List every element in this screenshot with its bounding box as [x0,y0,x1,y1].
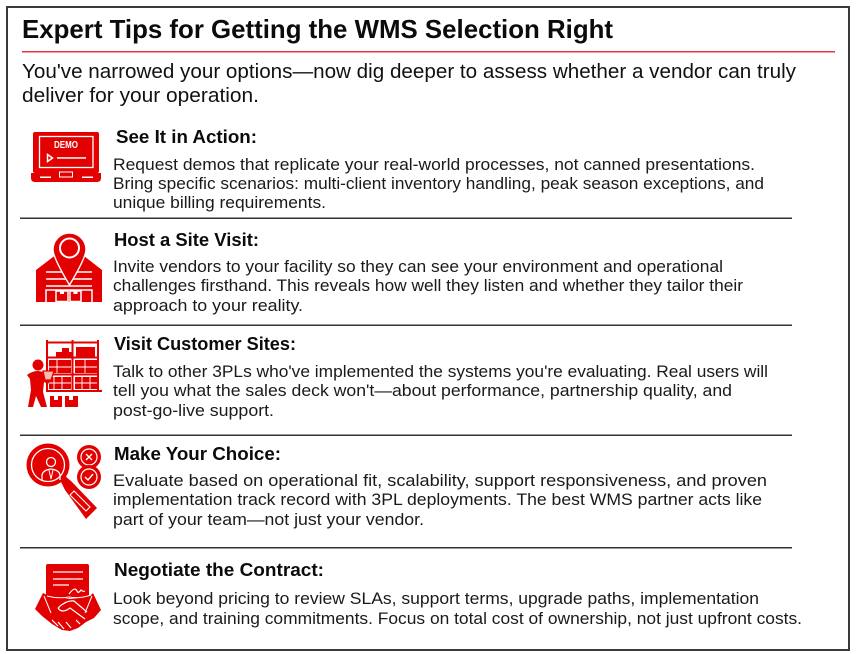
title: Expert Tips for Getting the WMS Selection Right [22,14,613,44]
tip: negotiate the contract [35,559,802,631]
body text [113,590,802,628]
body text: part of your team—not just your vendor. [113,511,424,529]
heading: Make Your Choice: [114,443,281,464]
icon: contract and handshake [35,564,101,631]
tip: visit customer sites [27,333,768,420]
intro text: deliver for your operation. [22,85,259,107]
body text [113,363,768,420]
body text: Request demos that replicate your real-world processes, not canned presentations. [113,156,755,174]
body text: Evaluate based on operational fit, scalability, support responsiveness, and proven [113,472,767,490]
body text: Look beyond pricing to review SLAs, support terms, upgrade paths, implementation [113,590,759,608]
body text: tell you what the sales deck won't—about performance, partnership quality, and [113,382,732,400]
body text [113,258,744,315]
body text: unique billing requirements. [113,194,326,212]
icon: warehouse with location pin [36,233,102,302]
intro text: You've narrowed your options—now dig deeper to assess whether a vendor can truly [22,61,796,83]
icon: warehouse worker and racks [27,340,102,407]
body text: scope, and training commitments. Focus on total cost of ownership, not just upfront costs. [113,610,802,628]
icon: demo laptop [31,132,101,182]
body text: approach to your reality. [113,297,303,315]
tip: see it in action [31,126,764,212]
body text: Bring specific scenarios: multi-client inventory handling, peak season exceptions, and [113,175,764,193]
heading: Negotiate the Contract: [114,559,324,580]
tip: make your choice [26,443,767,529]
body text: Talk to other 3PLs who've implemented the systems you're evaluating. Real users will [113,363,768,381]
body text: challenges firsthand. This reveals how well they listen and whether they tailor their [113,277,744,295]
icon: demo laptop: DEMO [54,140,78,151]
body text: post-go-live support. [113,402,274,420]
heading: Host a Site Visit: [114,229,259,250]
intro text [22,61,796,107]
heading: Visit Customer Sites: [114,333,296,354]
tip: host a site visit [36,229,744,315]
icon: magnifier with person and decision marks [26,444,101,519]
body text [113,472,767,529]
heading: See It in Action: [116,126,257,147]
body text: Invite vendors to your facility so they can see your environment and operational [113,258,723,276]
body text: implementation track record with 3PL deployments. The best WMS partner acts like [113,491,762,509]
body text [113,156,764,212]
